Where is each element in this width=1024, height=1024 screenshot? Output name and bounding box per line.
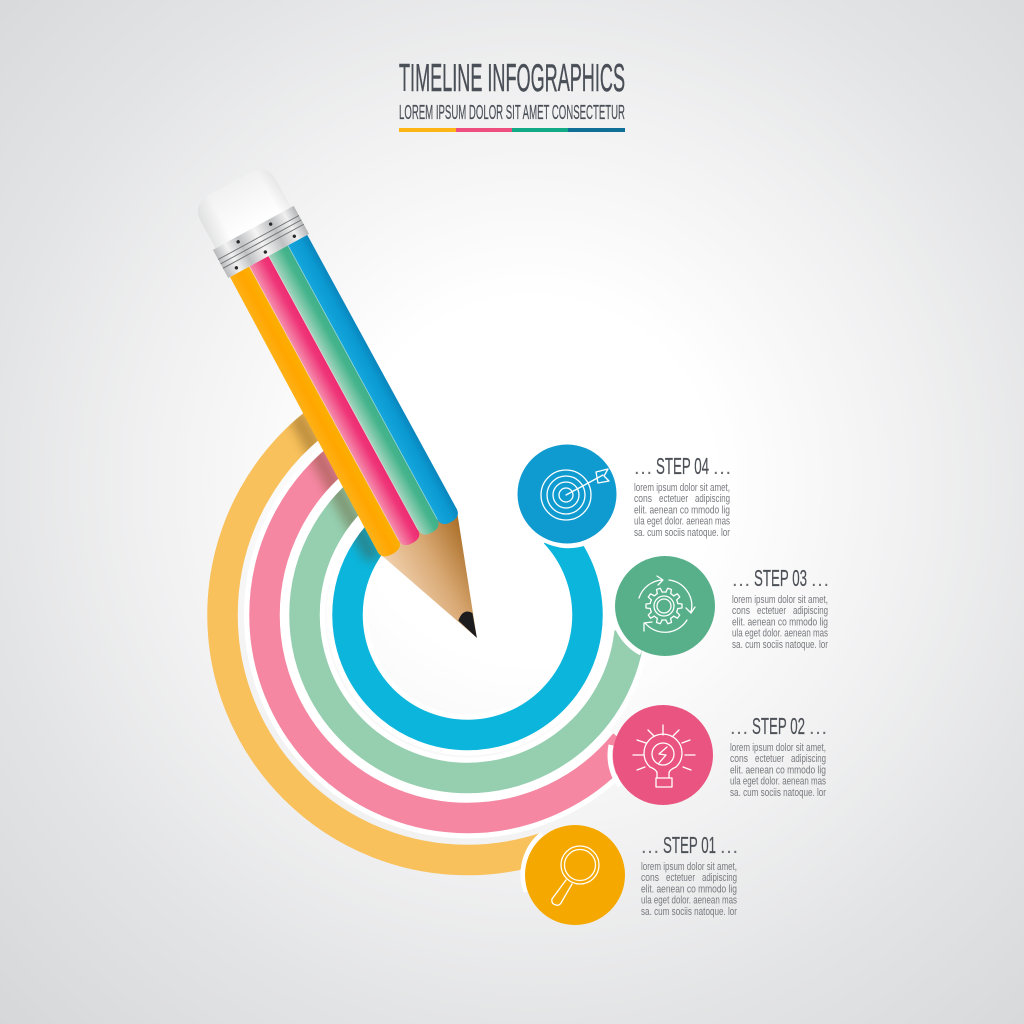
heading: ... — [713, 457, 731, 479]
pencil lead — [456, 609, 484, 642]
body text: adipiscing — [702, 872, 737, 884]
body text: ula eget dolor. aenean mas — [634, 516, 730, 528]
heading — [641, 832, 738, 858]
text: LOREM IPSUM DOLOR SIT AMET CONSECTETUR — [399, 102, 625, 124]
stripe: blue — [288, 235, 461, 527]
heading — [732, 565, 829, 591]
body text — [730, 742, 826, 799]
body text: adipiscing — [793, 605, 828, 617]
body text: adipiscing — [791, 753, 826, 765]
body text: elit. aenean co mmodo lig — [634, 504, 730, 516]
heading: ... — [730, 717, 748, 739]
body text — [634, 482, 730, 539]
circle: step 4 — [518, 444, 616, 546]
eraser — [192, 163, 291, 248]
arc: step 1 orange — [222, 407, 545, 860]
heading: ... — [634, 457, 652, 479]
icon: target with arrow — [541, 469, 609, 520]
body text — [732, 594, 828, 651]
body text: ula eget dolor. aenean mas — [730, 776, 826, 788]
body text — [641, 861, 737, 918]
arc: step 4 blue — [348, 506, 588, 735]
body text: ula eget dolor. aenean mas — [641, 895, 737, 907]
ferrule — [213, 206, 309, 278]
icon: light bulb — [633, 725, 695, 787]
body text: cons — [641, 872, 659, 884]
heading: STEP 03 — [754, 565, 807, 591]
heading: ... — [720, 836, 738, 858]
body text: adipiscing — [695, 493, 730, 505]
heading: STEP 01 — [663, 832, 716, 858]
circle: step 3 — [613, 556, 715, 656]
body text: sa. cum sociis natoque. lor — [732, 639, 828, 651]
body text: ula eget dolor. aenean mas — [732, 628, 828, 640]
body text: ectetuer — [757, 605, 786, 617]
body text: cons — [732, 605, 750, 617]
step 01 text — [641, 832, 738, 918]
heading — [730, 713, 827, 739]
step 04 text — [634, 453, 731, 539]
pencil wood — [378, 509, 515, 660]
heading: STEP 04 — [656, 453, 709, 479]
title block — [399, 57, 625, 132]
stripe: pink — [249, 256, 422, 548]
body text: ectetuer — [659, 493, 688, 505]
stripe: orange — [228, 266, 403, 560]
pencil — [189, 162, 517, 660]
body text: cons — [634, 493, 652, 505]
body text: lorem ipsum dolor sit amet, — [641, 861, 737, 873]
body text: ectetuer — [666, 872, 695, 884]
heading: ... — [732, 569, 750, 591]
stripe: green — [269, 245, 442, 538]
body text: elit. aenean co mmodo lig — [730, 764, 826, 776]
timeline arcs — [222, 407, 630, 860]
arc: step 3 green — [304, 473, 630, 778]
colour bar — [399, 128, 625, 132]
body text: sa. cum sociis natoque. lor — [641, 906, 737, 918]
body text: cons — [730, 753, 748, 765]
step 02 text — [730, 713, 827, 799]
body text: sa. cum sociis natoque. lor — [730, 787, 826, 799]
text: TIMELINE INFOGRAPHICS — [399, 57, 625, 100]
body text: lorem ipsum dolor sit amet, — [634, 482, 730, 494]
heading: ... — [641, 836, 659, 858]
pencil shadow on arcs — [288, 410, 381, 562]
body text: sa. cum sociis natoque. lor — [634, 527, 730, 539]
heading: ... — [811, 569, 829, 591]
body text: ectetuer — [755, 753, 784, 765]
icon: gear with cycle arrows — [639, 576, 695, 632]
body text: lorem ipsum dolor sit amet, — [732, 594, 828, 606]
heading — [634, 453, 731, 479]
step 03 text — [732, 565, 829, 651]
heading: ... — [809, 717, 827, 739]
icon: magnifying glass — [552, 846, 599, 905]
arc: step 2 pink — [264, 451, 625, 818]
body text: elit. aenean co mmodo lig — [641, 883, 737, 895]
circle: step 1 — [523, 825, 625, 925]
body text: elit. aenean co mmodo lig — [732, 616, 828, 628]
heading: STEP 02 — [752, 713, 805, 739]
body text: lorem ipsum dolor sit amet, — [730, 742, 826, 754]
circle: step 2 — [610, 705, 713, 805]
